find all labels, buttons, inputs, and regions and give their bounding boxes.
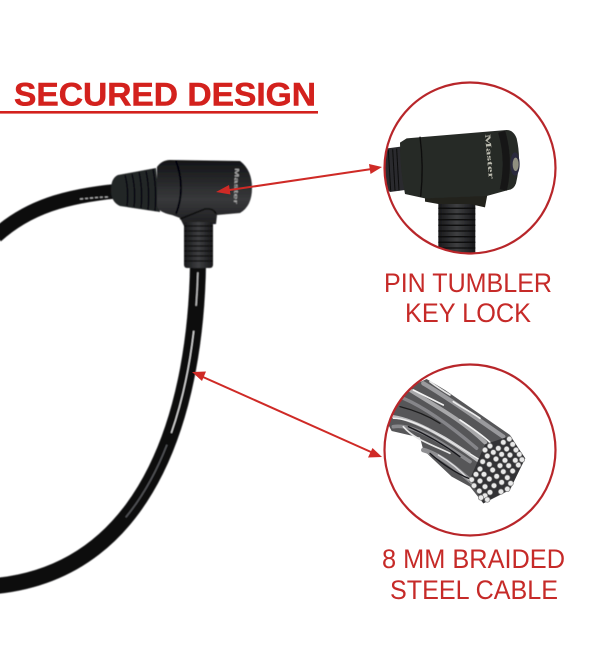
title: SECURED DESIGN [14,76,316,112]
label: pin tumbler key lock [384,268,552,328]
label: 8 mm braided steel cable: 8 MM BRAIDED [382,544,565,574]
lock close-up: Master [483,134,496,180]
lock body: Master [232,168,239,205]
arrow: lock to pin tumbler detail [216,164,382,194]
label: pin tumbler key lock: KEY LOCK [405,298,531,328]
braided wire rope close-up [387,379,525,503]
lock threaded collar [111,168,160,212]
label: 8 mm braided steel cable: STEEL CABLE [390,575,558,605]
arrow: cable to steel detail [192,372,382,458]
lock body [157,160,252,226]
cable lock product photo [0,160,252,586]
upper cable [0,191,118,236]
lock neck [184,222,213,268]
label: pin tumbler key lock: PIN TUMBLER [384,268,552,298]
label: 8 mm braided steel cable [382,544,565,605]
lower cable [0,264,198,586]
detail circle: steel cable [384,364,556,536]
detail circle: key lock [380,82,556,257]
